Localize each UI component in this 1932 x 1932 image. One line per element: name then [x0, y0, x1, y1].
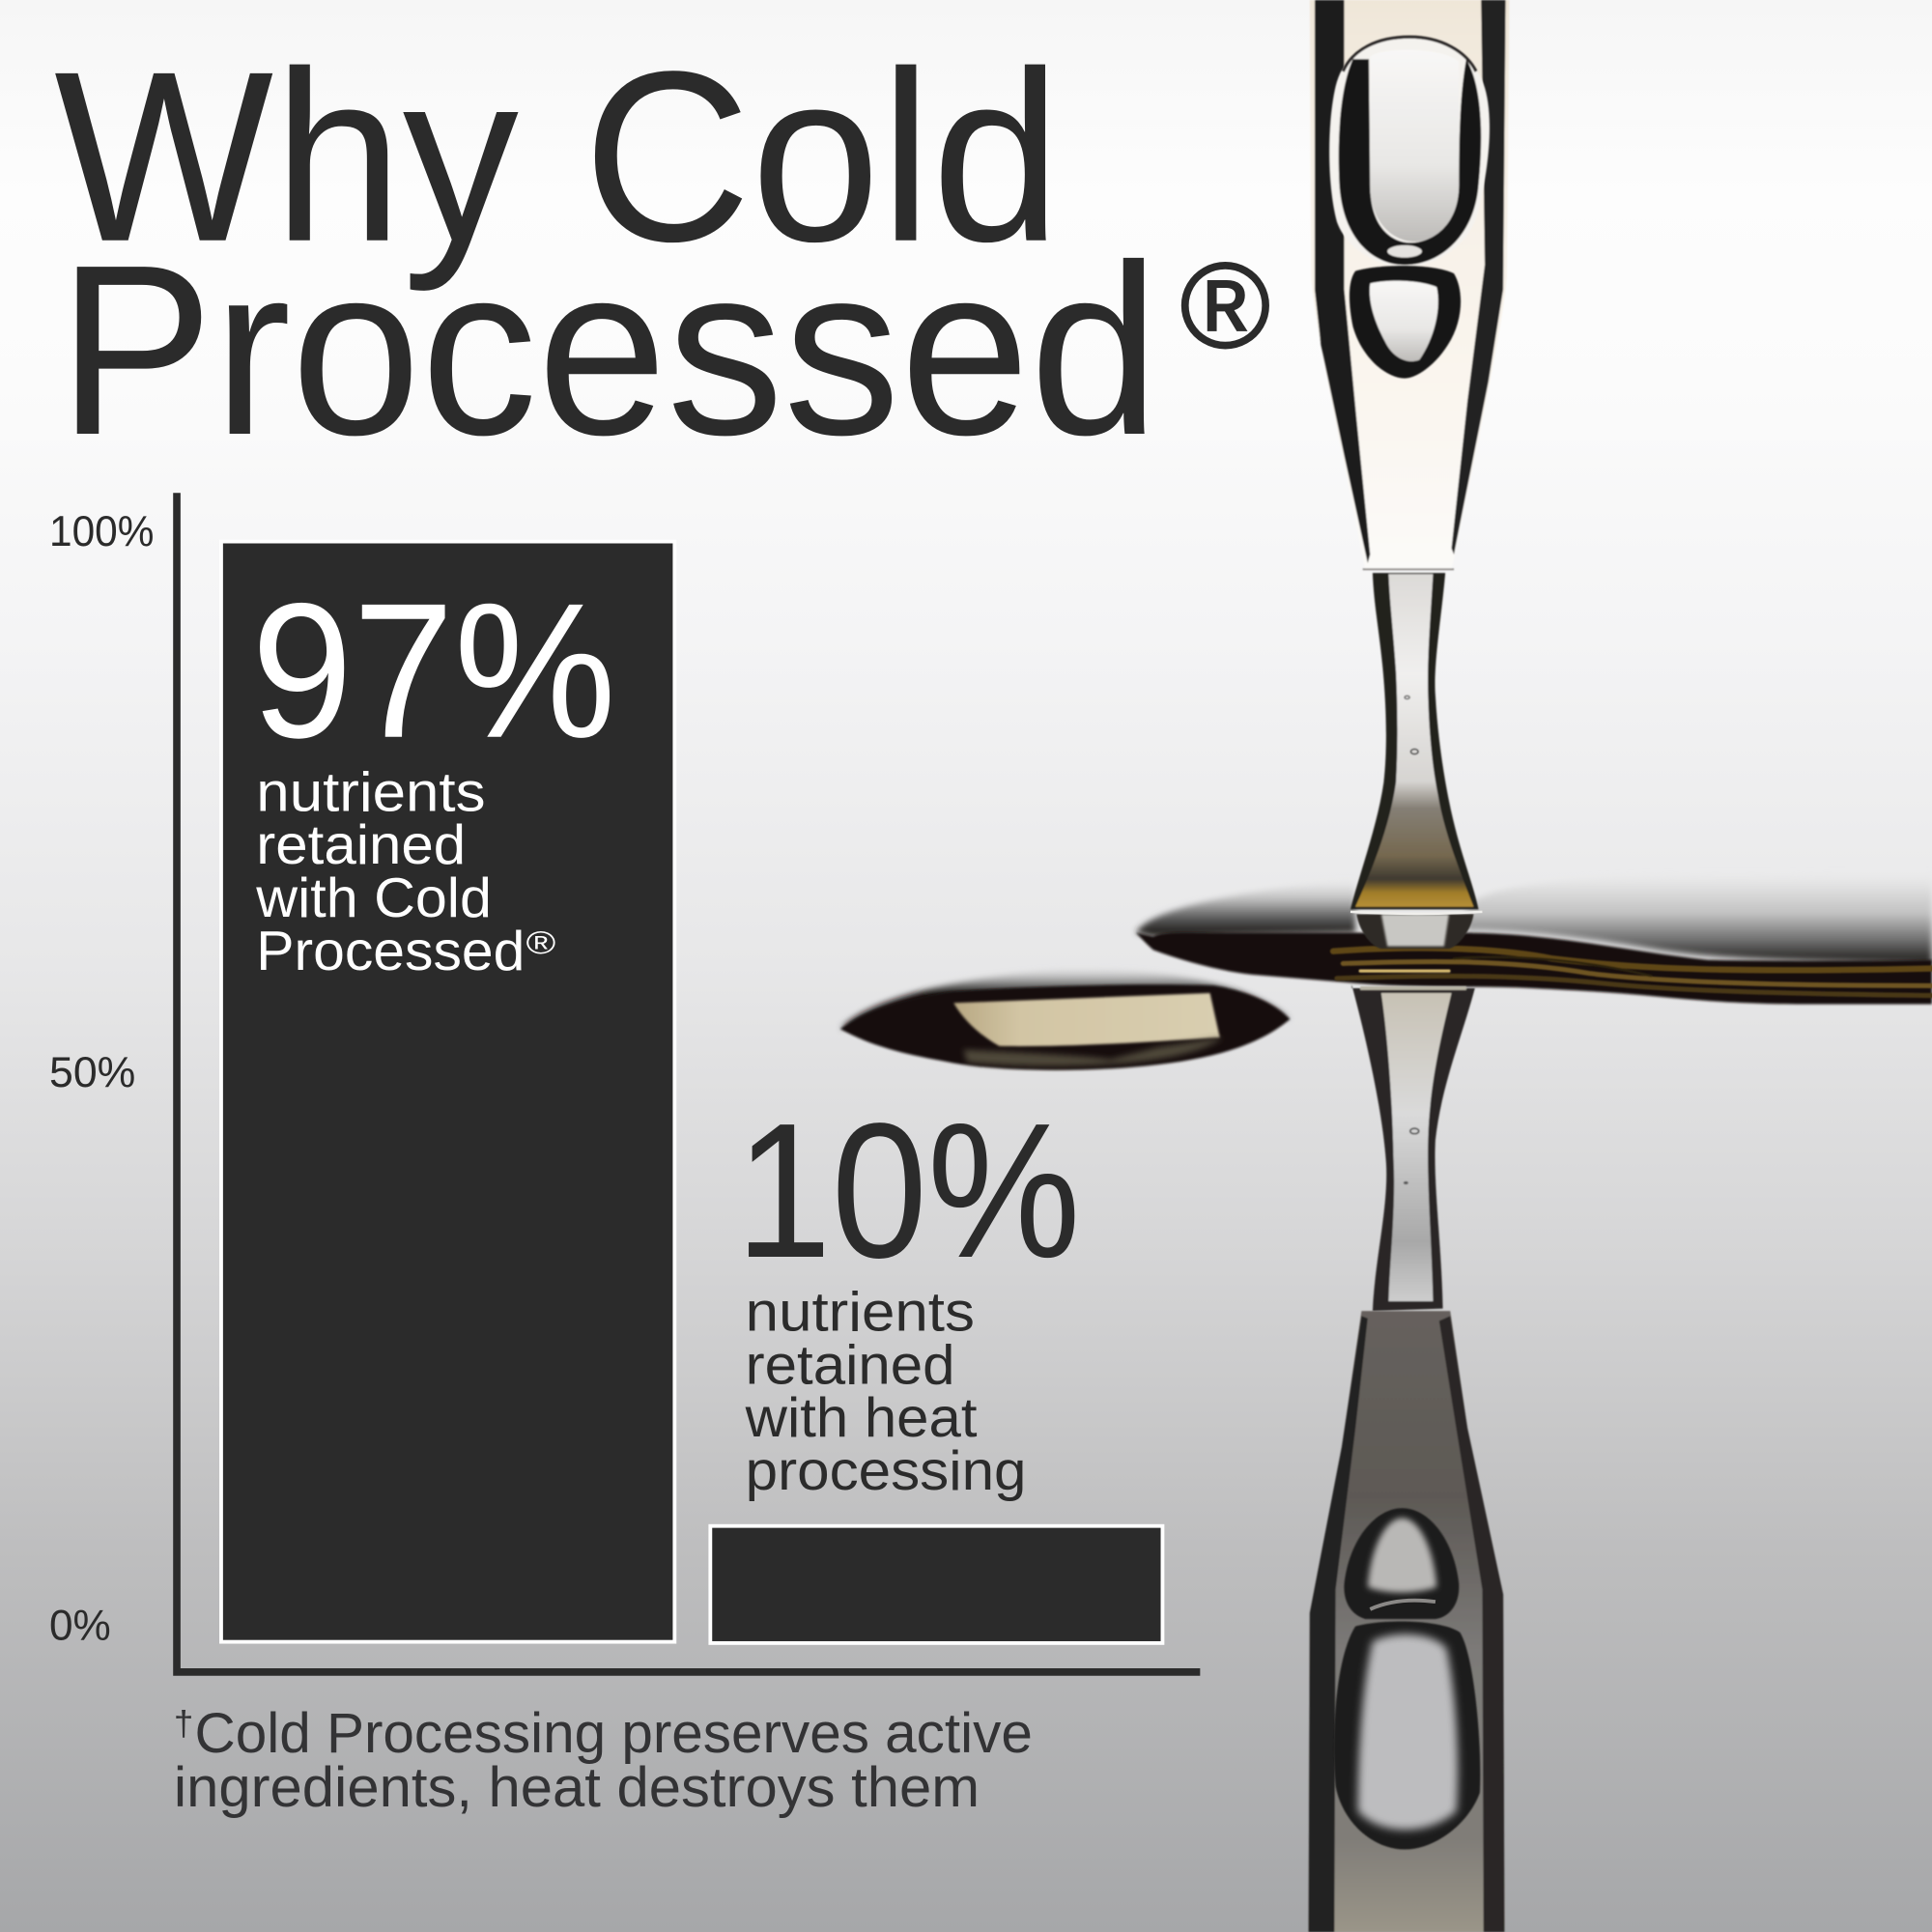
bar caption: retained: [746, 1334, 955, 1396]
bar caption: with Cold: [255, 867, 492, 929]
bar caption: Processed: [256, 921, 525, 982]
bar: heat processing 10%: [710, 1084, 1162, 1643]
bar caption: nutrients: [746, 1282, 975, 1344]
bar caption: ®: [526, 925, 555, 961]
bar caption: with heat: [745, 1387, 978, 1449]
footnote: †: [174, 1704, 193, 1743]
footnote: Cold Processing preserves active: [195, 1702, 1033, 1765]
bar caption: nutrients: [256, 761, 486, 823]
neck reflection in pool: [1356, 914, 1474, 949]
lower oil neck reflection: [1351, 984, 1475, 1311]
value 10%: 10%: [735, 1084, 1081, 1298]
bar chart: [49, 493, 1200, 1672]
lower bubble: [1350, 266, 1461, 379]
y axis labels: 0%: [49, 1603, 111, 1650]
photo: oil pipette and reflection: [840, 0, 1932, 1932]
title: Why Cold: [54, 22, 1061, 293]
y axis labels: 50%: [49, 1049, 135, 1096]
upper glass pipette: [1310, 0, 1509, 569]
title: [54, 22, 1270, 486]
bar: cold processed 97%: [221, 542, 674, 1642]
footnote: ingredients, heat destroys them: [174, 1756, 980, 1819]
bar caption: retained: [256, 814, 466, 876]
detached oil drop: [840, 970, 1290, 1070]
y axis labels: 100%: [49, 508, 154, 555]
upper bubble: [1329, 37, 1490, 268]
lower reflected bubbles: [1334, 1508, 1480, 1850]
footnote: [174, 1702, 1033, 1819]
upper oil neck: [1350, 573, 1479, 909]
title: ®: [1180, 240, 1270, 374]
lower glass pipette reflection: [1309, 1311, 1504, 1932]
oil streaks: [1333, 949, 1932, 996]
chart axes: [177, 493, 1200, 1672]
bar caption: processing: [746, 1440, 1027, 1502]
value 97%: 97%: [251, 564, 616, 779]
title: Processed: [58, 215, 1159, 486]
oil pool: [1136, 870, 1932, 1005]
bar caption: [745, 1282, 1026, 1502]
y axis labels: [49, 508, 154, 1650]
bar caption: [255, 761, 555, 982]
